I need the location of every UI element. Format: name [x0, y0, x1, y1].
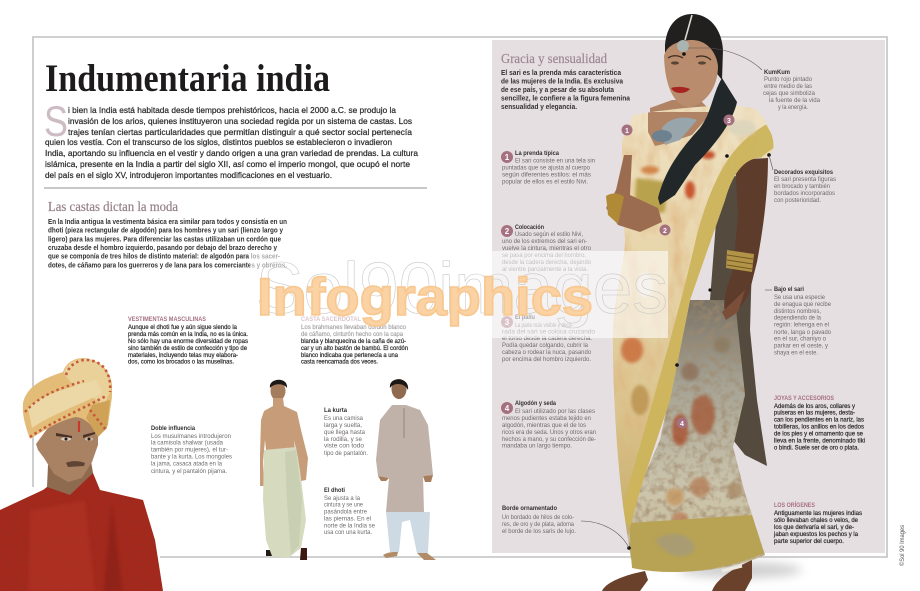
callout 2: colocación: 2: [505, 227, 510, 236]
turban: [23, 358, 112, 439]
text block: joyas y accesorios: o bindi. Suele ser de oro o plata.: [774, 444, 859, 452]
callout 1: la prenda típica: popular de ellos es el estilo Nivi.: [502, 178, 588, 186]
text block: joyas y accesorios: lleva en la frente, denominado tiki: [774, 438, 865, 444]
callout 3: el pallu: el torso desde la cadera derecha.: [502, 335, 592, 342]
text block: joyas y accesorios: can los pendientes en la nariz, las: [774, 416, 864, 424]
numbered markers on sari: 4: [680, 421, 684, 428]
callout: borde ornamentado: Un bordado de hilos de colo-: [502, 514, 574, 521]
text block: sari intro: de ese país, y a pesar de su absoluta: [501, 87, 614, 94]
text block: joyas y accesorios: Además de los aros, collares y: [774, 403, 856, 410]
text block: sari intro: de las mujeres de la India. Es exclusiva: [501, 78, 623, 86]
photo caption: la kurta: larga y suelta,: [324, 422, 362, 429]
text block: casta sacerdotal: blanco indicaba que pertenecía a una: [301, 352, 398, 359]
callout 1: la prenda típica: según diferentes estilos: el más: [502, 172, 591, 178]
callout: kumkum: Punto rojo pintado: [764, 76, 812, 83]
heading: Las castas dictan la moda: Las castas dictan la moda: [48, 199, 178, 214]
callout: borde ornamentado: [502, 505, 576, 535]
callout: kumkum: la fuente de la vida: [769, 97, 820, 104]
numbered markers on sari: [622, 52, 771, 550]
watermark outline text: Sol90images: [256, 249, 668, 329]
callout: bajo el sari: región: lehenga en el: [774, 322, 829, 328]
callout: decorados exquisitos: bordados incorporados: [774, 190, 835, 197]
callout: kumkum: [763, 69, 820, 111]
callout 4: algodón y seda: mandaba un largo tiempo.: [502, 442, 572, 450]
text block: castas: [48, 219, 287, 269]
text block: vestimentas masculinas: VESTIMENTAS MASCULINAS: [128, 316, 207, 323]
callout 3: el pallu: por encima del hombro izquierdo.: [502, 356, 591, 363]
callout 2: colocación: se pasa por encima del hombro,: [502, 252, 586, 259]
callout 4: algodón y seda: Algodón y seda: [515, 400, 556, 407]
heading: Gracia y sensualidad: Gracia y sensualidad: [501, 51, 607, 66]
callout: bajo el sari: [774, 286, 831, 356]
callout: kumkum: entre medio de las: [764, 83, 812, 90]
illustration: woman in sari: [602, 14, 802, 591]
text block: joyas y accesorios: de los pies y el ornamento que se: [774, 430, 863, 438]
callout 4: algodón y seda: ricos era de seda. Unos y otros eran: [502, 429, 596, 436]
numbered markers on sari: 3: [727, 118, 731, 125]
text block: doble influencia: bante y la kurta. Los mongoles: [151, 454, 232, 460]
text block: casta sacerdotal: de cáñamo, cinturón hecho con la capa: [301, 331, 403, 338]
feet: [602, 571, 648, 591]
numbered markers on sari: 1: [625, 128, 629, 135]
text block: sari intro: [501, 70, 630, 111]
intro text block: trajes tenían ciertas particularidades que permitían distinguir a qué sector social pertenecía: [68, 128, 412, 137]
photo caption: el dhoti: pasándola entre: [324, 508, 367, 516]
text block: castas: En la India antigua la vestimenta básica era similar para todos y consistía en un: [48, 219, 287, 226]
floor shadow: [678, 562, 802, 578]
braid: [658, 78, 737, 205]
text block: los orígenes: sólo llevaban chales o velos, de: [774, 517, 858, 524]
photo caption: la kurta: la rodilla, y se: [324, 436, 362, 443]
photo caption: el dhoti: las piernas. En el: [324, 516, 371, 522]
face and hair: [665, 14, 723, 80]
photo caption: el dhoti: usa con una kurta.: [324, 529, 372, 536]
callout: kumkum: y la energía.: [778, 104, 808, 111]
left arm and hand: [606, 155, 662, 232]
callout: bajo el sari: Bajo el sari: [774, 286, 804, 293]
dark outer panel: [710, 170, 767, 466]
text block: doble influencia: Doble influencia: [151, 425, 195, 432]
callout: decorados exquisitos: Decorados exquisitos: [774, 169, 833, 176]
text block: casta sacerdotal: CASTA SACERDOTAL: [301, 316, 361, 323]
coat: [0, 473, 163, 591]
necklace: [662, 118, 697, 145]
intro text block: i bien la India está habitada desde tiempos prehistóricos, hacia el 2000 a.C. se produjo la: [68, 106, 396, 115]
intro text block: invasión de los arios, quienes instituyeron una sociedad regida por un sistema de castas. Los: [68, 117, 412, 126]
callout: bajo el sari: parkar en el oeste, y: [774, 342, 829, 350]
callout 2: colocación: Colocación: [515, 224, 544, 231]
callout: decorados exquisitos: [774, 169, 836, 204]
neck and face: [47, 455, 93, 495]
callout: bajo el sari: Se usa una especie: [774, 294, 825, 301]
callout: decorados exquisitos: El sari presenta figuras: [774, 176, 836, 183]
text block: los orígenes: parte superior del cuerpo.: [774, 538, 844, 545]
callout: bajo el sari: shaya en el este.: [774, 350, 818, 356]
intro text block: del país en el siglo XV, introdujeron importantes modificaciones en el vestuario.: [45, 171, 332, 180]
bangles: [726, 250, 754, 272]
text block: castas: dotes, de cáñamo para los guerreros y de lana para los comerciantes y obreros.: [48, 262, 287, 269]
text block: vestimentas masculinas: materiales, incluyendo telas muy elabora-: [128, 352, 238, 359]
callout 4: algodón y seda: El sari utilizado por las clases: [515, 408, 595, 415]
right arm and hand: [724, 158, 768, 313]
text block: joyas y accesorios: [774, 395, 865, 452]
callout 2: colocación: vuelve la cintura, mientras el otro: [502, 245, 591, 252]
text block: casta sacerdotal: car y un alto bastón de bambú. El cordón: [301, 345, 408, 352]
leader lines: [581, 48, 773, 548]
text block: los orígenes: los que derivaría el sari, y de-: [774, 524, 854, 531]
callout 3: el pallu: [501, 314, 595, 363]
callout: decorados exquisitos: con posterioridad.: [774, 197, 821, 204]
title: Indumentaria india: [45, 57, 330, 100]
text block: doble influencia: Los musulmanes introdujeron: [151, 433, 231, 440]
text block: castas: que se componía de tres hilos de distinto material: de algodón para los sacer-: [48, 254, 281, 261]
intro text block: islámica, presente en la India a partir del siglo XII, así como el imperio mongol, que ocupó el norte: [45, 160, 410, 169]
callout: borde ornamentado: el borde de los saris de lujo.: [502, 528, 576, 535]
text block: vestimentas masculinas: [128, 316, 248, 366]
text block: doble influencia: [151, 425, 232, 475]
intro text block: [44, 98, 418, 180]
callout 2: colocación: Usado según el estilo Nivi,: [515, 231, 583, 238]
callout: bajo el sari: en el sur, chaniyo o: [774, 336, 826, 342]
callout: borde ornamentado: res, de oro y de plata, adorna: [502, 521, 574, 528]
neck and chest: [650, 100, 712, 145]
callout: decorados exquisitos: en brocado y también: [774, 183, 830, 190]
text block: joyas y accesorios: pulseras en las mujeres, desta-: [774, 410, 855, 416]
photo caption: la kurta: Es una camisa: [324, 415, 363, 422]
photo caption: el dhoti: cintura y se une: [324, 502, 363, 508]
callout 1: la prenda típica: 1: [505, 153, 510, 162]
callout 1: la prenda típica: [501, 150, 595, 186]
text block: sari intro: sencillez, le confiere a la figura femenina: [501, 96, 630, 102]
callout 4: algodón y seda: hechos a mano, y su confección de-: [502, 436, 596, 443]
photo caption: el dhoti: norte de la India se: [324, 522, 375, 530]
callout 3: el pallu: El pallu: [515, 314, 535, 321]
text block: vestimentas masculinas: No sólo hay una enorme diversidad de ropas: [128, 338, 248, 345]
photo caption: la kurta: viste con todo: [324, 442, 364, 450]
text block: castas: dhoti (pieza rectangular de algodón) para los hombres y un sari (lienzo largo y: [48, 228, 283, 235]
callout 2: colocación: [501, 224, 591, 273]
text block: sari intro: sensualidad y elegancia.: [501, 104, 577, 111]
photo caption: la kurta: La kurta: [324, 407, 347, 414]
intro text block: quien los vestía. Con el transcurso de los siglos, distintos pueblos se establecieron o invadieron: [45, 138, 392, 147]
watermark: [250, 249, 668, 338]
callout 4: algodón y seda: menos pudientes estaba tejido en: [502, 415, 591, 422]
draped sari: [613, 106, 773, 535]
intro text block: India, aportando su influencia en el vestir y dando origen a una gran variedad de prendas. La cultura: [45, 149, 418, 158]
skirt: [625, 300, 765, 572]
callout 3: el pallu: cabeza o rodear la nuca, pasando: [502, 349, 591, 356]
photo caption: la kurta: tipo de pantalón.: [324, 450, 368, 457]
text block: los orígenes: Antiguamente las mujeres indias: [774, 510, 862, 517]
photo caption: la kurta: [324, 407, 368, 457]
callout: bajo el sari: de enagua que recibe: [774, 301, 831, 308]
text block: sari intro: El sari es la prenda más característica: [501, 70, 621, 77]
callout 4: algodón y seda: [501, 400, 596, 450]
text block: los orígenes: jaban expuestos los pechos y la: [773, 531, 858, 538]
photo caption: el dhoti: [324, 487, 375, 536]
text block: casta sacerdotal: Los brahmanes llevaban cordón blanco: [301, 324, 406, 331]
text block: vestimentas masculinas: sino también de estilo de confección y tipo de: [128, 345, 247, 352]
panel: Gracia y sensualidad background: [492, 40, 885, 553]
callout 1: la prenda típica: La prenda típica: [515, 150, 559, 157]
callout 3: el pallu: Podía quedar colgando, cubrir la: [502, 342, 588, 349]
callout 3: el pallu: La parte más visible y deco-: [515, 322, 573, 329]
callout: kumkum: cejas que simboliza: [763, 90, 815, 97]
text block: joyas y accesorios: JOYAS Y ACCESORIOS: [774, 395, 835, 402]
text block: vestimentas masculinas: prenda más común en la India, no es la única.: [128, 331, 248, 338]
text block: casta sacerdotal: casta reencarnada dos veces.: [301, 358, 378, 366]
callout 2: colocación: desde la cadera derecha, dejando: [502, 259, 591, 266]
watermark infographics text: Infographics: [257, 268, 593, 327]
callout 2: colocación: uno de los extremos del sari en-: [502, 238, 587, 245]
callout 1: la prenda típica: El sari consiste en una tela sin: [515, 158, 595, 164]
text block: los orígenes: LOS ORÍGENES: [774, 500, 816, 509]
callout: kumkum: KumKum: [764, 69, 790, 76]
drop cap: S: [44, 98, 68, 146]
text block: vestimentas masculinas: Aunque el dhoti fue y aún sigue siendo la: [128, 324, 237, 331]
callout 2: colocación: al vientre parcialmente a la vista.: [502, 266, 588, 273]
callout 3: el pallu: rada del sari se coloca cruzando: [502, 329, 595, 336]
text block: doble influencia: también por mujeres), el tur-: [151, 446, 228, 454]
callout: bajo el sari: distintos nombres,: [774, 308, 821, 315]
callout 1: la prenda típica: puntadas que se ajusta al cuerpo: [502, 164, 590, 172]
text block: doble influencia: la camisola shalwar (usada: [151, 440, 223, 446]
text block: los orígenes: [773, 500, 862, 545]
callout: bajo el sari: norte, langa o pavado: [774, 329, 831, 336]
text block: casta sacerdotal: [301, 316, 408, 366]
forehead ornament: [685, 15, 692, 40]
text block: casta sacerdotal: blanda y blanquecina de la caña de azú-: [301, 338, 406, 345]
callout: borde ornamentado: Borde ornamentado: [502, 505, 557, 512]
credit: ©Sol 90 Images: [898, 524, 906, 566]
photo: man in dhoti: [260, 380, 308, 560]
numbered markers on sari: 2: [663, 228, 667, 235]
photo caption: el dhoti: El dhoti: [324, 487, 345, 494]
text block: doble influencia: cintura, y el pantalón pijama.: [151, 468, 227, 475]
callout 4: algodón y seda: 4: [505, 404, 510, 413]
text block: joyas y accesorios: tobilleras, los anillos en los dedos: [774, 424, 864, 430]
photo caption: la kurta: que llega hasta: [324, 429, 365, 436]
text block: doble influencia: la jama, casaca atada en la: [151, 460, 222, 468]
skirt border: [629, 515, 764, 572]
callout: bajo el sari: dependiendo de la: [774, 314, 821, 322]
photo caption: el dhoti: Se ajusta a la: [324, 495, 360, 502]
text block: vestimentas masculinas: dos, como los brocados o las muselinas.: [128, 358, 234, 366]
callout 3: el pallu: 3: [505, 318, 510, 327]
illustration: man with turban: [0, 358, 170, 591]
photo: man in kurta: [376, 379, 436, 560]
text block: castas: ligero) para las mujeres. Para diferenciar las castas utilizaban un cordón que: [48, 236, 281, 243]
text block: castas: cruzaba desde el hombro izquierdo, pasando por debajo del brazo derecho y: [48, 245, 277, 252]
callout 4: algodón y seda: algodón, mientras que el de los: [502, 422, 586, 429]
